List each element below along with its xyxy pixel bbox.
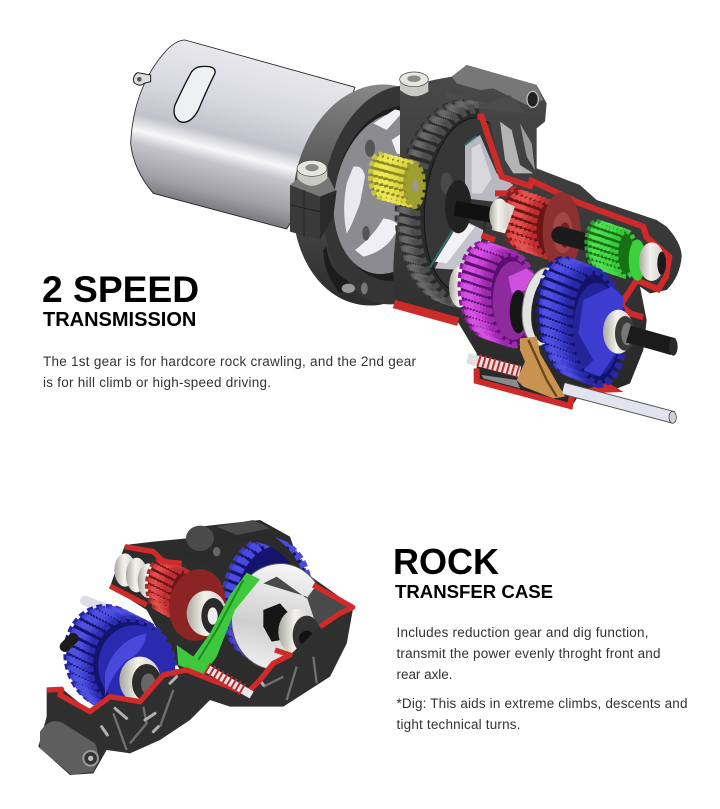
- red gear disc: [543, 192, 581, 271]
- rear blue gear: [217, 535, 316, 664]
- case arc and lug: [183, 520, 302, 570]
- text block: transfer case description: tight technical turns.: [396, 717, 520, 732]
- gear cover plate: [424, 118, 498, 288]
- lower housing: [38, 607, 353, 775]
- interior white parts: [430, 135, 513, 270]
- front blue hub: [91, 618, 183, 715]
- text block: transmission description: is for hill climb or high-speed driving.: [43, 375, 271, 390]
- rod end: [85, 601, 113, 612]
- text block: transmission description: The 1st gear is for hardcore rock crawling, and the 2nd gear: [43, 354, 416, 369]
- green gear ring and bearing: [629, 239, 666, 281]
- subheading: transmission: TRANSMISSION: [43, 309, 196, 331]
- text block: transfer case description: Includes reduction gear and dig function,: [396, 625, 648, 640]
- output bearing and shaft: [278, 609, 327, 654]
- green shift lever: [177, 573, 260, 675]
- motor mount ring and plate: [279, 73, 488, 317]
- red gear disc and bearing: [164, 565, 231, 645]
- mount clamp block with bolts: [290, 160, 337, 240]
- black spur gear: [394, 99, 486, 308]
- black end bolt: [65, 638, 73, 647]
- red section cut lines: [477, 117, 669, 406]
- electric motor can: [131, 40, 355, 229]
- illustration: rock transfer case cutaway: [38, 520, 353, 775]
- heading: 2 speed: 2 SPEED: [42, 268, 199, 310]
- green gear: [587, 221, 636, 277]
- blue gear hub and bearing: [573, 283, 635, 377]
- clutch drum: [223, 556, 350, 677]
- top bolt: [400, 72, 428, 96]
- heading: rock: ROCK: [393, 541, 499, 582]
- shift collar: [517, 265, 570, 348]
- text block: transfer case description: rear axle.: [396, 667, 452, 682]
- upper case silhouette: [110, 520, 353, 697]
- shift fork: [517, 337, 565, 398]
- text block: transfer case description: [396, 625, 688, 732]
- text block: transmission description: [43, 354, 416, 390]
- left bearing: [449, 266, 471, 307]
- input bearing: [489, 198, 515, 233]
- red gear: [503, 191, 560, 256]
- red section cut lines: [47, 547, 353, 712]
- yellow pinion gear: [371, 154, 423, 206]
- spring: [478, 360, 518, 372]
- illustration: 2 speed transmission cutaway: [131, 40, 682, 423]
- shift rod: [467, 358, 676, 423]
- front blue gear: [57, 599, 183, 726]
- subheading: transfer case: TRANSFER CASE: [395, 581, 553, 602]
- housing silhouette: [393, 65, 682, 407]
- spring box interior: [482, 375, 520, 388]
- text block: transfer case description: transmit the power evenly throght front and: [396, 646, 660, 661]
- text block: transfer case description: *Dig: This aids in extreme climbs, descents and: [396, 696, 688, 711]
- top housing details: [447, 65, 543, 173]
- input bearings: [114, 553, 159, 598]
- blue gear: [536, 258, 627, 386]
- black shaft: [560, 235, 597, 245]
- spring: [207, 668, 252, 695]
- magenta gear hub: [493, 261, 537, 340]
- red housing band: [394, 304, 458, 322]
- transmission cutaway assembly: [371, 65, 682, 423]
- output shaft: [628, 334, 678, 356]
- front bearing: [119, 657, 161, 703]
- red gear: [148, 560, 197, 621]
- magenta gear: [458, 242, 539, 347]
